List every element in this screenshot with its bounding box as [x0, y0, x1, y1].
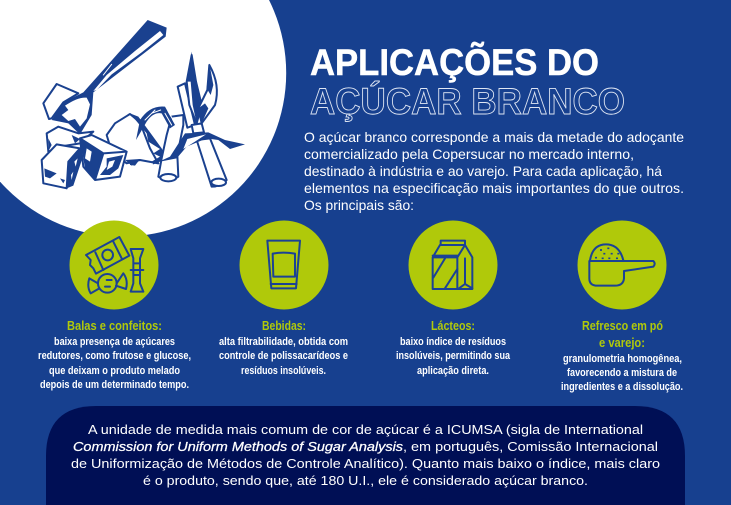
caption: balas e confeitos: que deixam o produto melado	[49, 365, 180, 377]
icon: candies	[70, 220, 158, 310]
caption: bebidas	[219, 318, 348, 377]
caption: balas e confeitos	[38, 318, 191, 391]
title	[310, 41, 625, 122]
title line 2 outlined: AÇÚCAR BRANCO	[310, 80, 625, 122]
bottom note text: de Uniformização de Métodos de Controle Analítico). Quanto mais baixo o índice, mais claro	[71, 456, 660, 471]
icon: milk carton	[408, 220, 498, 310]
mallet and sugar cubes	[42, 20, 167, 188]
bottom note text: , em português, Comissão Internacional	[403, 439, 658, 454]
caption: refresco em po e varejo: granulometria homogênea,	[563, 353, 682, 365]
intro text	[304, 129, 684, 213]
caption: balas e confeitos: redutores, como frutose e glucose,	[38, 350, 191, 362]
caption: bebidas: alta filtrabilidade, obtida com	[219, 336, 348, 348]
title line 1: APLICAÇÕES DO	[310, 41, 599, 83]
caption: lacteos: baixo índice de resíduos	[400, 336, 506, 348]
bottom note text: A unidade de medida mais comum de cor de açúcar é a ICUMSA (sigla de International	[88, 422, 643, 437]
intro text: elementos na especificação mais importantes do que outros.	[304, 180, 684, 196]
caption: lacteos: Lácteos:	[431, 318, 475, 333]
intro text: Os principais são:	[304, 197, 414, 213]
caption: bebidas: resíduos insolúveis.	[241, 365, 326, 377]
bottom note panel	[46, 406, 685, 505]
caption: balas e confeitos: depois de um determinado tempo.	[40, 379, 189, 391]
white circle	[0, 0, 286, 237]
icon: glass	[240, 220, 328, 310]
caption: lacteos: aplicação direta.	[417, 365, 489, 377]
bottom note text: Commission for Uniform Methods of Sugar Analysis	[73, 439, 404, 454]
caption: lacteos	[396, 318, 511, 377]
illustration: sugar cubes, mallet and sugar cane	[42, 20, 245, 188]
intro text: destinado à indústria e ao varejo. Para cada aplicação, há	[304, 163, 662, 179]
caption: refresco em po e varejo: ingredientes e a dissolução.	[561, 381, 683, 393]
bottom note text: é o produto, sendo que, até 180 U.I., ele é considerado açúcar branco.	[143, 473, 588, 488]
intro text: comercializado pela Copersucar no mercado interno,	[304, 146, 634, 162]
caption: refresco em po e varejo: e varejo:	[599, 335, 645, 350]
caption: bebidas: Bebidas:	[262, 318, 306, 333]
caption: bebidas: controle de polissacarídeos e	[219, 350, 348, 362]
caption: balas e confeitos: Balas e confeitos:	[67, 318, 162, 333]
intro text: O açúcar branco corresponde a mais da metade do adoçante	[304, 129, 684, 145]
caption: lacteos: insolúveis, permitindo sua	[396, 350, 511, 362]
caption: balas e confeitos: baixa presença de açúcares	[54, 336, 175, 348]
caption: refresco em po e varejo	[561, 318, 683, 393]
icon: powder scoop	[578, 220, 666, 310]
caption: refresco em po e varejo: favorecendo a mistura de	[567, 367, 677, 379]
caption: refresco em po e varejo: Refresco em pó	[582, 318, 663, 333]
sugar cane	[130, 52, 245, 187]
bottom note text	[71, 422, 660, 488]
